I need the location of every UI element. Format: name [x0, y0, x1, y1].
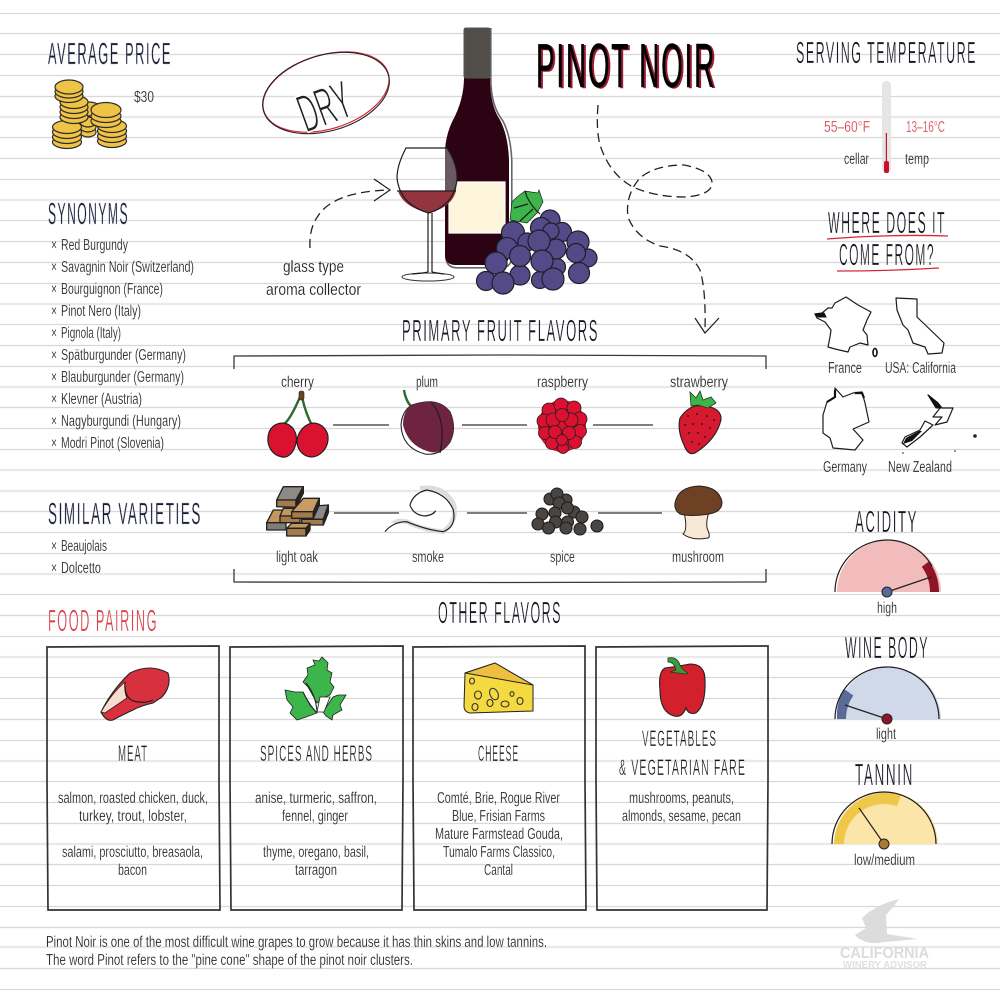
glass type label: glass type	[283, 257, 344, 276]
synonyms list: Spätburgunder (Germany)	[61, 347, 186, 364]
panel: meat: MEAT	[118, 741, 148, 766]
icon: gold coins	[52, 80, 126, 148]
synonyms list: Bourguignon (France)	[61, 281, 163, 298]
synonyms list: ×	[51, 303, 57, 320]
synonyms list: ×	[51, 259, 57, 276]
footnote: The word Pinot refers to the "pine cone" shape of the pinot noir clusters.	[46, 952, 413, 969]
connector	[333, 425, 662, 513]
text: SYNONYMS	[48, 196, 129, 231]
text: fennel, ginger	[282, 808, 348, 825]
panel: vegetables: VEGETABLES	[642, 726, 717, 751]
flavor: spice	[532, 488, 603, 566]
text	[255, 790, 377, 879]
panel: spices and herbs	[230, 646, 403, 910]
synonyms list: Pignola (Italy)	[61, 325, 121, 342]
text: Cantal	[484, 862, 513, 879]
map: Germany: Germany	[823, 459, 867, 476]
text: bacon	[118, 862, 147, 879]
text: PRIMARY FRUIT FLAVORS	[402, 313, 599, 348]
flavor: smoke	[385, 488, 455, 566]
temperature values: 13–16°C	[906, 119, 945, 136]
arrow: glass type pointer	[310, 179, 390, 248]
text: anise, turmeric, saffron,	[255, 790, 377, 807]
similar varieties list	[51, 538, 107, 577]
text: salami, prosciutto, breasaola,	[62, 844, 203, 861]
flavor: cherry	[268, 374, 328, 457]
badge: dry stamp	[253, 38, 399, 147]
text: SIMILAR VARIETIES	[48, 496, 202, 531]
text: OTHER FLAVORS	[438, 595, 562, 630]
map: France: France	[828, 360, 862, 377]
glass type label: aroma collector	[266, 280, 361, 299]
synonyms list: Red Burgundy	[61, 237, 128, 254]
icon: steak	[101, 668, 169, 720]
panel: cheese: CHEESE	[478, 741, 519, 766]
panel: vegetables	[596, 646, 768, 910]
flavor: raspberry	[537, 374, 588, 454]
text: FOOD PAIRING	[48, 603, 158, 638]
temperature values	[824, 119, 945, 168]
logo: California Winery Advisor: WINERY ADVISOR	[843, 960, 928, 971]
text: TANNIN	[855, 757, 914, 792]
text: thyme, oregano, basil,	[263, 844, 369, 861]
flavor: raspberry: raspberry	[537, 374, 588, 391]
bracket bottom	[234, 569, 766, 582]
map: California: USA: California	[885, 360, 956, 377]
bracket top	[234, 355, 766, 369]
icon: parsley	[285, 657, 346, 720]
map: California	[885, 298, 956, 377]
temperature values: cellar	[844, 151, 869, 168]
text: Comté, Brie, Rogue River	[437, 790, 560, 807]
gauge: wine body: light	[876, 726, 896, 743]
text: Blue, Frisian Farms	[452, 808, 545, 825]
flavor: spice: spice	[550, 549, 575, 566]
logo: California Winery Advisor	[840, 899, 929, 971]
synonyms list: Savagnin Noir (Switzerland)	[61, 259, 194, 276]
map: France	[815, 297, 877, 377]
synonyms list: Nagyburgundi (Hungary)	[61, 413, 181, 430]
logo: California Winery Advisor: CALIFORNIA	[840, 945, 929, 962]
badge: dry stamp: DRY	[290, 70, 360, 144]
synonyms list: ×	[51, 325, 57, 342]
flavor: strawberry: strawberry	[670, 374, 728, 391]
flavor: light oak: light oak	[276, 549, 318, 566]
flavor: cherry: cherry	[281, 374, 314, 391]
panel: cheese	[413, 646, 586, 910]
wine bottle	[445, 28, 512, 268]
synonyms list: ×	[51, 281, 57, 298]
footnote: Pinot Noir is one of the most difficult wine grapes to grow because it has thin skins and low tannins.	[46, 934, 547, 951]
temperature values: 55–60°F	[824, 119, 870, 136]
flavor: strawberry	[670, 374, 728, 454]
text	[622, 790, 741, 825]
panel: meat	[47, 646, 220, 910]
flavor: plum: plum	[416, 374, 438, 391]
synonyms list: ×	[51, 237, 57, 254]
text: AVERAGE PRICE	[48, 36, 172, 71]
text: salmon, roasted chicken, duck,	[58, 790, 208, 807]
similar varieties list: Beaujolais	[61, 538, 107, 555]
map: New Zealand	[888, 395, 977, 476]
similar varieties list: ×	[51, 560, 57, 577]
text: ACIDITY	[855, 504, 918, 539]
text: Mature Farmstead Gouda,	[435, 826, 563, 843]
similar varieties list: ×	[51, 538, 57, 555]
text	[58, 790, 208, 879]
text: Tumalo Farms Classico,	[443, 844, 555, 861]
gauge: tannin: low/medium	[854, 852, 915, 869]
synonyms list: Pinot Nero (Italy)	[61, 303, 141, 320]
gauge: wine body	[835, 667, 941, 743]
flavor: mushroom: mushroom	[672, 549, 724, 566]
map: New Zealand: New Zealand	[888, 459, 952, 476]
text	[435, 790, 563, 879]
text: tarragon	[295, 862, 337, 879]
map: Germany	[823, 388, 869, 476]
panel: spices and herbs: SPICES AND HERBS	[260, 741, 373, 766]
icon: cheese wedge	[464, 663, 533, 713]
synonyms list: ×	[51, 391, 57, 408]
synonyms list	[51, 237, 194, 452]
glass type label	[266, 257, 361, 299]
icon: red pepper	[660, 658, 705, 716]
flavor: mushroom	[672, 486, 724, 566]
gauge: acidity	[835, 540, 941, 617]
heading: where does it come from	[827, 205, 948, 272]
flavor: smoke: smoke	[412, 549, 444, 566]
panel: vegetables: & VEGETARIAN FARE	[619, 755, 746, 780]
text: PINOT NOIR	[536, 32, 716, 101]
illustration: bottle and glass	[397, 28, 512, 281]
gauge: acidity: high	[877, 600, 897, 617]
synonyms list: ×	[51, 435, 57, 452]
text: turkey, trout, lobster,	[79, 808, 187, 825]
text: almonds, sesame, pecan	[622, 808, 741, 825]
footnote	[46, 934, 547, 969]
arrow: dashed loop to fruit flavors	[597, 105, 719, 333]
synonyms list: Klevner (Austria)	[61, 391, 142, 408]
price value: $30	[134, 89, 154, 106]
text: mushrooms, peanuts,	[629, 790, 734, 807]
flavor: light oak	[267, 487, 328, 566]
wine glass	[397, 148, 457, 281]
synonyms list: ×	[51, 347, 57, 364]
flavor: plum	[401, 374, 454, 454]
gauge: tannin	[832, 792, 938, 869]
synonyms list: Blauburgunder (Germany)	[61, 369, 184, 386]
synonyms list: ×	[51, 413, 57, 430]
synonyms list: Modri Pinot (Slovenia)	[61, 435, 164, 452]
illustration: grape cluster	[476, 190, 597, 294]
synonyms list: ×	[51, 369, 57, 386]
temperature values: temp	[905, 151, 929, 168]
similar varieties list: Dolcetto	[61, 560, 101, 577]
thermometer	[882, 81, 891, 173]
